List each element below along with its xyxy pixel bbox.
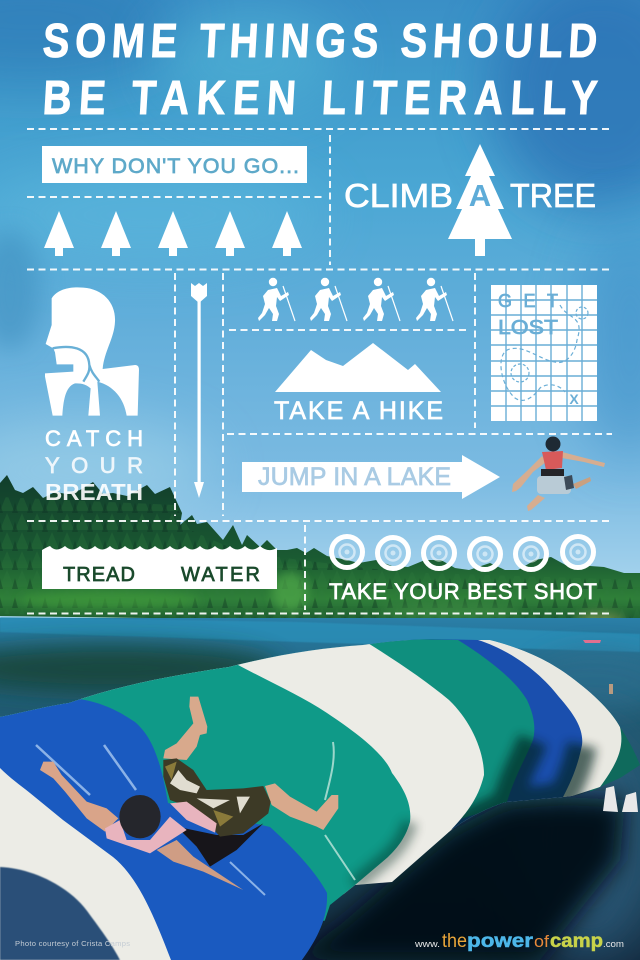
other leg (265, 783, 338, 830)
title line 2: BE TAKEN LITERALLY (41, 72, 599, 125)
panel: get lost map: LOST (498, 317, 558, 339)
blob shadow on water (290, 797, 625, 960)
title line 1: SOME THINGS SHOULD (41, 15, 599, 68)
right arm (157, 840, 243, 890)
targets (332, 536, 594, 570)
blue band near (0, 698, 327, 960)
word of: of (534, 932, 549, 951)
white band far (0, 640, 622, 832)
label: WHY DON'T YOU GO... (52, 154, 299, 178)
website logo: www. (414, 939, 440, 949)
torso (177, 823, 263, 867)
dashed grid lines (27, 129, 612, 614)
word tread: TREAD (63, 564, 135, 586)
far band shading (449, 740, 582, 832)
word camp: camp (550, 931, 603, 952)
panel: catch your breath (45, 287, 143, 505)
map text: GET (498, 291, 558, 311)
word com: .com (603, 939, 624, 949)
life vest (105, 802, 217, 853)
website logo (414, 931, 624, 952)
head and lungs icon (45, 287, 139, 416)
lake water (0, 617, 640, 960)
mountains (275, 343, 441, 392)
buoys (603, 786, 638, 812)
caption: CATCH (45, 426, 143, 451)
word the: the (442, 931, 467, 952)
panel: take your best shot (329, 536, 597, 604)
shorts (163, 758, 271, 837)
inflatable water blob (0, 630, 640, 960)
word power: power (467, 931, 534, 952)
creases (36, 745, 136, 795)
panel: take a hike (258, 278, 453, 425)
caption: TAKE YOUR BEST SHOT (329, 579, 597, 604)
near teal shading (355, 822, 410, 885)
teal band near (0, 664, 410, 921)
left arm (40, 762, 118, 832)
arrow banner (242, 455, 500, 499)
far tip (590, 703, 640, 792)
panel: catch your breath: BREATH (45, 479, 143, 505)
word tree: TREE (510, 177, 596, 214)
background tree line (0, 475, 640, 634)
caption: JUMP IN A LAKE (258, 463, 451, 491)
panel: jump in a lake (242, 455, 500, 499)
head (119, 795, 161, 838)
raised leg (163, 697, 207, 760)
letter A: A (469, 178, 491, 213)
jumping boy photo (512, 436, 605, 511)
word water: WATER (181, 564, 260, 586)
caption: TAKE A HIKE (274, 397, 443, 425)
white band near (0, 768, 171, 960)
trail (501, 305, 579, 400)
word climb: CLIMB (344, 177, 453, 214)
panel: climb a tree (344, 144, 596, 256)
panel: catch your breath: YOUR (45, 453, 143, 478)
bottom left shade (0, 867, 120, 960)
row of small trees (44, 211, 302, 256)
x mark: X (569, 391, 579, 407)
man on the blob (40, 697, 338, 890)
hikers (258, 278, 453, 321)
shoreline foliage highlights (20, 572, 624, 628)
teal band far (81, 639, 534, 819)
photo credit: Photo courtesy of Crista Camps (15, 939, 130, 948)
shorts print (170, 770, 250, 813)
panel: get lost map (491, 285, 597, 421)
panel: tread water (42, 546, 277, 589)
blue band far (238, 639, 582, 830)
panel: why don't you go (42, 146, 307, 183)
arrow pointing down (191, 283, 207, 498)
white band middle (0, 644, 484, 894)
background sky (0, 0, 640, 640)
title (41, 15, 599, 125)
big tree icon (448, 144, 512, 256)
map grid (491, 285, 597, 421)
